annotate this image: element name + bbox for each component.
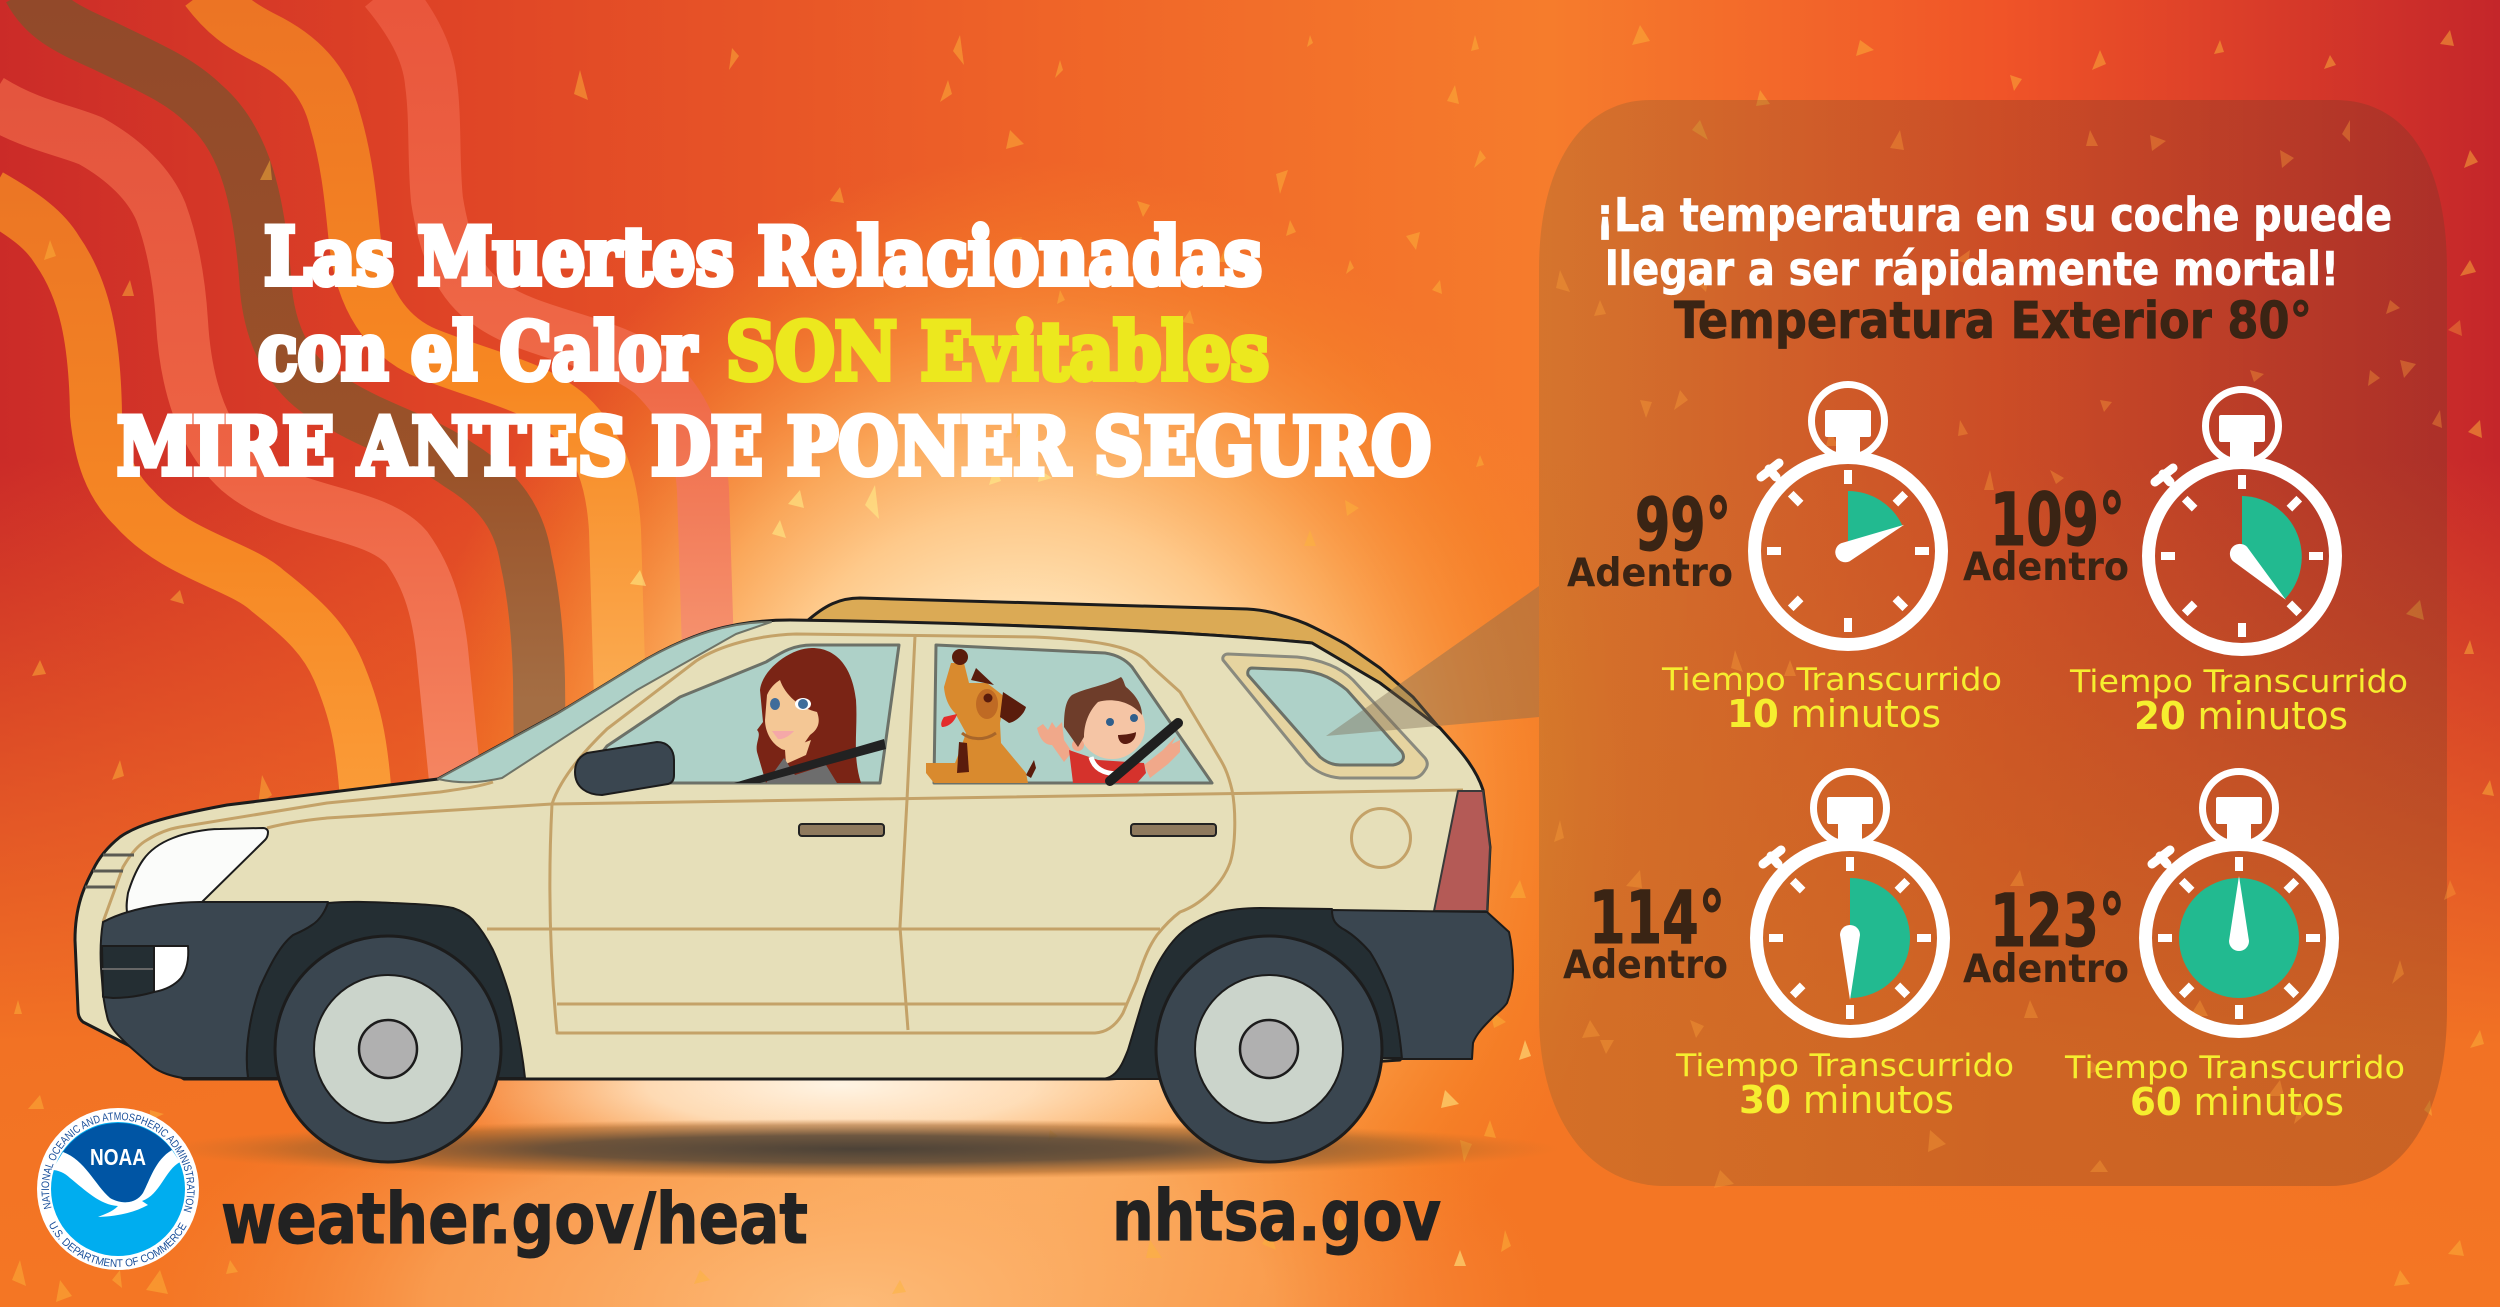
arms and hands [1037,722,1180,778]
hair [757,648,861,783]
panel heading: llegar a ser rápidamente mortal! [1605,242,2339,296]
title: Las Muertes Relacionadas [264,210,1262,303]
door handles [799,824,1216,836]
stopwatch: 30 minutes [1756,772,1944,1032]
front wheel arch [247,902,525,1078]
heat waves [0,0,722,800]
panel heading [1596,188,2392,351]
white gull [52,1150,180,1217]
fuel cap [1352,808,1410,868]
stopwatch: 10 minutes [1754,384,1942,644]
body [75,620,1490,1079]
panel heading: Temperatura Exterior 80° [1674,292,2312,351]
eyes [770,698,811,710]
NOAA logo [37,1108,199,1270]
front bumper [101,902,328,1078]
title: MIRE ANTES DE PONER SEGURO [117,400,1431,493]
url: weather.gov/heat: weather.gov/heat [221,1178,808,1260]
seal text: NATIONAL OCEANIC AND ATMOSPHERIC ADMINISTRATION [41,1112,195,1212]
front wheel [275,936,501,1162]
seat belt [1110,723,1178,781]
elapsed time: 20 minutes [2069,664,2408,738]
elapsed time: 20 minutes: Tiempo Transcurrido [2069,664,2408,700]
title [117,210,1431,493]
ground shadow [160,1119,1560,1179]
panel: temperature in car [1539,100,2462,1188]
panel background [1539,100,2447,1186]
dark blue sky [63,1123,172,1202]
dog [926,649,1036,783]
elapsed time: 60 minutes: Tiempo Transcurrido [2064,1050,2405,1086]
elapsed time: 30 minutes: 30 minutos [1739,1078,1954,1122]
confetti inside panel [1554,120,2462,1188]
headlight [127,828,268,912]
collar [1091,757,1122,774]
reading: 123 degrees: 123° [1990,879,2125,964]
NOAA wordmark: NOAA [90,1144,146,1170]
panel heading: ¡La temperatura en su coche puede [1596,188,2392,242]
url: nhtsa.gov: nhtsa.gov [1112,1175,1441,1257]
rear wheel arch [1100,908,1402,1079]
reading: 109 degrees: Adentro [1963,545,2129,590]
boy [1037,677,1180,783]
reading: 123 degrees [1963,879,2129,992]
reading: 109 degrees: 109° [1990,478,2125,563]
front window [600,645,899,783]
reading: 99 degrees: Adentro [1567,551,1733,596]
reading: 99 degrees: 99° [1635,483,1731,568]
reading: 109 degrees [1963,478,2129,590]
title: SON Evitables [726,305,1269,398]
elapsed time: 30 minutes: Tiempo Transcurrido [1675,1048,2014,1084]
reading: 99 degrees [1567,483,1733,596]
roof rack [806,598,1447,737]
car [75,598,1513,1162]
rear quarter window frame [1223,654,1427,778]
rear window [934,645,1212,783]
neck [785,740,811,764]
shirt [1069,750,1146,783]
head [1079,695,1145,759]
reading: 114 degrees: 114° [1589,876,1725,961]
pointer cone from car window to panel [1326,586,1539,736]
face [765,680,819,750]
stopwatch: 20 minutes [2148,390,2336,650]
tail light [1434,791,1490,911]
side mirror [575,742,674,795]
elapsed time: 60 minutes: 60 minutos [2130,1080,2344,1124]
seal text: U.S. DEPARTMENT OF COMMERCE [50,1221,187,1267]
stopwatch: 60 minutes [2146,772,2332,1032]
elapsed time: 30 minutes [1675,1048,2014,1122]
hair [1064,677,1142,747]
rear wheel [1156,936,1382,1162]
reading: 114 degrees: Adentro [1563,943,1728,988]
jacket [766,758,837,783]
fog light [102,946,188,998]
elapsed time: 60 minutes [2064,1050,2405,1124]
elapsed time: 20 minutes: 20 minutos [2134,694,2348,738]
title: con el Calor [258,305,697,398]
reading: 114 degrees [1563,876,1728,988]
seal text [41,1112,195,1267]
lips [772,731,794,739]
rear quarter window [1248,668,1403,765]
door and panel lines [103,634,1463,1033]
reading: 123 degrees: Adentro [1963,947,2129,992]
face details [1106,714,1138,744]
grille lines [85,855,134,887]
elapsed time: 10 minutes: 10 minutos [1727,692,1941,736]
seat belt [734,739,886,783]
woman driver [734,648,886,783]
elapsed time: 10 minutes: Tiempo Transcurrido [1661,662,2002,698]
elapsed time: 10 minutes [1661,662,2002,736]
windshield [438,622,771,782]
rear bumper [1332,910,1513,1059]
